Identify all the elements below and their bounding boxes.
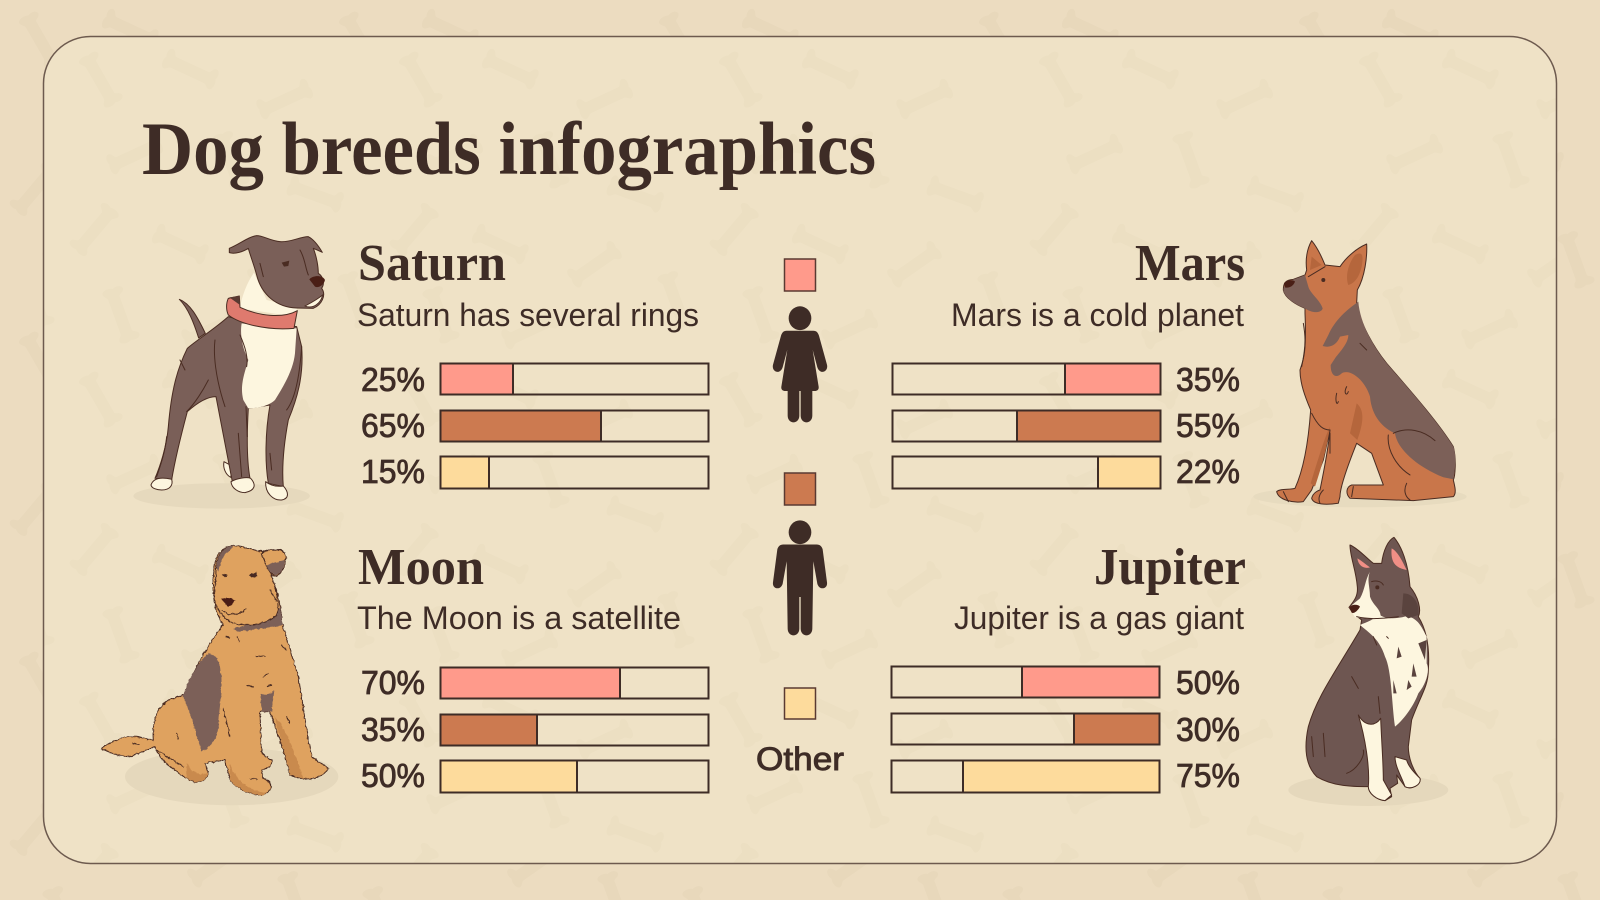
bar chart: Moon: 35%	[361, 711, 425, 748]
legend: other swatch	[784, 688, 816, 719]
bar chart: Jupiter	[892, 664, 1240, 794]
bar chart: Moon: 70%	[361, 664, 425, 701]
bar chart: Mars: 35%	[1176, 361, 1240, 398]
bar chart: Saturn: 65%	[361, 407, 425, 444]
illustration: Saturn dog	[133, 236, 325, 509]
illustration: Mars dog	[1253, 241, 1467, 507]
legend: female swatch	[784, 259, 816, 291]
bar chart: Moon: 50%	[361, 757, 425, 794]
legend: male swatch	[784, 473, 816, 505]
bar chart: Saturn	[361, 361, 708, 490]
text: Saturn description: Saturn has several rings	[357, 297, 699, 333]
bar chart: Jupiter: 50%	[1176, 664, 1240, 701]
bar chart: Saturn: 25%	[361, 361, 425, 398]
text: Moon description: The Moon is a satellite	[357, 600, 681, 636]
text: Saturn heading: Saturn	[358, 235, 506, 292]
text: Mars description: Mars is a cold planet	[951, 297, 1244, 333]
bar chart: Saturn: 15%	[361, 453, 425, 490]
legend label: Other: Other	[756, 741, 844, 777]
bar chart: Moon	[361, 664, 708, 794]
title: Dog breeds infographics	[142, 108, 876, 191]
text: Jupiter heading: Jupiter	[1094, 539, 1246, 596]
bar chart: Jupiter: 75%	[1176, 757, 1240, 794]
icon: male figure	[773, 520, 827, 635]
icon: female figure	[773, 306, 827, 422]
bar chart: Mars: 55%	[1176, 407, 1240, 444]
text: Jupiter description: Jupiter is a gas giant	[954, 600, 1244, 636]
text: Mars heading: Mars	[1135, 235, 1245, 292]
illustration: Jupiter dog	[1288, 537, 1448, 806]
illustration: Moon dog	[102, 546, 338, 805]
bar chart: Jupiter: 30%	[1176, 711, 1240, 748]
bar chart: Mars	[892, 361, 1240, 490]
bar chart: Mars: 22%	[1176, 453, 1240, 490]
text: Moon heading: Moon	[358, 539, 484, 596]
